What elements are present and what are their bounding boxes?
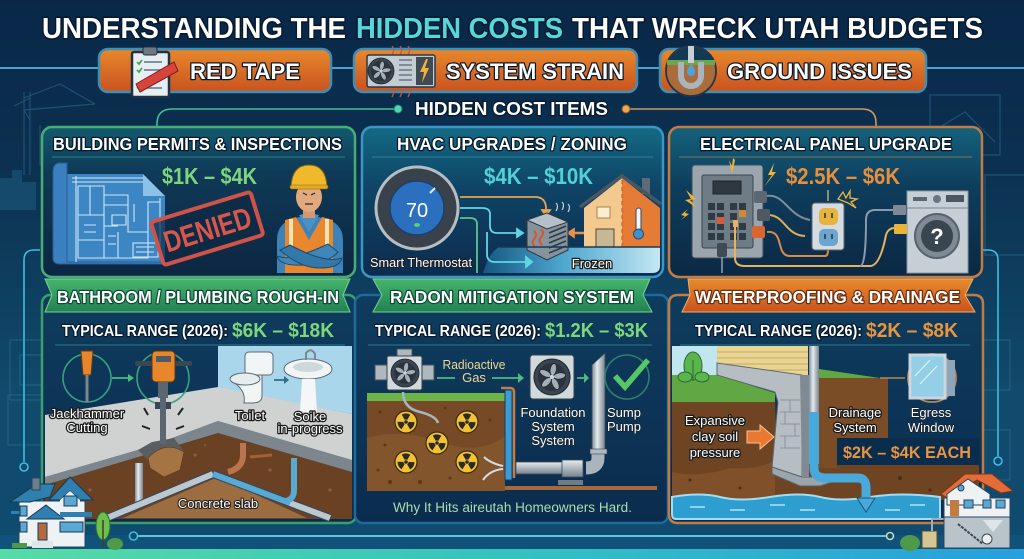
ribbon heading [45,279,350,312]
panel: bathroom plumbing [42,279,356,523]
category pill: red tape: RED TAPE [190,59,300,84]
ribbon heading: RADON MITIGATION SYSTEM [390,287,634,307]
icon: washing machine: ? [930,224,944,249]
icon: check mark: Pump [607,419,641,434]
icon: smart thermostat: 70 [406,200,428,222]
frozen ground: Frozen [572,256,612,271]
stamp: denied: DENIED [160,201,256,259]
icon: house bottom left [10,477,123,550]
icon: drain pipe in ground [666,46,716,96]
label: radioactive gas: Gas [462,370,486,385]
label: radioactive gas: Radioactive [442,357,506,372]
ribbon heading [373,279,652,312]
icon: jackhammer [135,351,192,444]
panel: electrical panel upgrade [669,127,982,277]
scene: foundation cutaway [672,346,979,519]
ribbon heading: WATERPROOFING & DRAINAGE [695,287,960,307]
price: $1K – $4K [162,163,257,189]
price range: $6K – $18K [232,320,335,342]
panel: building permits [42,127,355,277]
price: $2.5K – $6K [786,163,900,189]
icon: tree [678,352,709,382]
icon: fan system: System [531,419,575,434]
category pill: ground issues [660,46,926,96]
category pill: red tape [99,47,331,97]
category pill: system strain [354,46,637,97]
price range: TYPICAL RANGE (2026): [375,323,541,340]
icon: sink [274,350,343,436]
icon: sink: in-progress [277,421,343,436]
title: HIDDEN COSTS [356,13,563,45]
category pill: ground issues: GROUND ISSUES [727,59,912,84]
icon: blueprint [53,163,165,264]
panel: radon mitigation [355,279,668,523]
heading: HVAC UPGRADES / ZONING [397,134,627,154]
title: UNDERSTANDING THE [42,13,346,45]
icon: smart thermostat [370,167,472,270]
icon: overloaded outlet [812,190,857,250]
label: Egress [911,405,952,420]
label: Soike [294,409,326,424]
price: $4K – $10K [484,163,593,189]
price range [62,320,335,342]
panel: waterproofing [669,279,983,523]
label: drainage system: System [833,420,877,435]
icon: tree and bush [96,512,123,550]
label: drainage system [829,405,881,435]
scene: slab cutaway [45,346,352,519]
icon: washing machine [893,191,968,273]
title: THAT WRECK UTAH BUDGETS [572,13,983,45]
label: radioactive gas [437,357,524,385]
price range: TYPICAL RANGE (2026): [695,323,862,340]
price range [695,320,959,342]
ribbon heading [682,279,975,312]
icon: toilet [230,352,273,423]
icon: vent pipe [516,353,607,485]
icon: jackhammer bit in circle: Cutting [66,420,108,435]
label: Sump [607,405,641,420]
cords [735,196,908,266]
label: Toilet [235,408,266,423]
label: Smart Thermostat [370,255,472,270]
icon: check mark [605,355,649,434]
icon: strained AC unit [367,46,435,97]
ribbon heading: BATHROOM / PLUMBING ROUGH-IN [57,287,339,307]
icon: house split hot and cold [500,176,661,247]
section label: hidden cost items: HIDDEN COST ITEMS [415,99,608,119]
icon: egress window: Window [908,420,955,435]
icon: fan system: System [531,433,575,448]
icon: inspector with crossed arms [277,165,343,273]
icon: breaker panel [681,158,908,273]
price range: $1.2K – $3K [545,320,649,342]
heading: BUILDING PERMITS & INSPECTIONS [53,134,342,154]
price range: $2K – $8K [866,320,959,342]
divider under ranges, panel one [55,344,345,346]
label: concrete slab: Concrete slab [178,496,258,511]
label: clay soil pressure: pressure [690,445,740,460]
icon: fan intake [375,349,434,390]
price range: TYPICAL RANGE (2026): [62,323,228,340]
icon: jackhammer bit in circle [50,351,134,435]
scene: soil with radon [367,388,657,491]
icon: fan system [520,355,589,448]
category pill: system strain: SYSTEM STRAIN [446,59,624,84]
icon: egress window [908,354,956,435]
price range [375,320,649,342]
label: drainage system: Drainage [829,405,881,420]
label: Jackhammer [50,406,125,421]
title [42,13,983,45]
footer strip [0,549,1024,559]
label: clay soil pressure [685,413,774,460]
flow lines [460,197,585,273]
icon: house bottom right [900,474,1013,551]
label: Foundation [520,405,586,420]
icon: outdoor AC unit [527,213,568,260]
label: clay soil pressure: clay soil [692,429,738,444]
label: clay soil pressure: Expansive [685,413,745,428]
caption: Why It Hits aireutah Homeowners Hard. [393,500,632,515]
panel: HVAC upgrades [362,127,663,277]
callout: cost each: $2K – $4K EACH [843,443,971,462]
frozen ground [483,247,660,273]
icon: clipboard with red tape [132,47,178,97]
heading: ELECTRICAL PANEL UPGRADE [700,134,952,154]
callout: cost each [837,438,979,465]
